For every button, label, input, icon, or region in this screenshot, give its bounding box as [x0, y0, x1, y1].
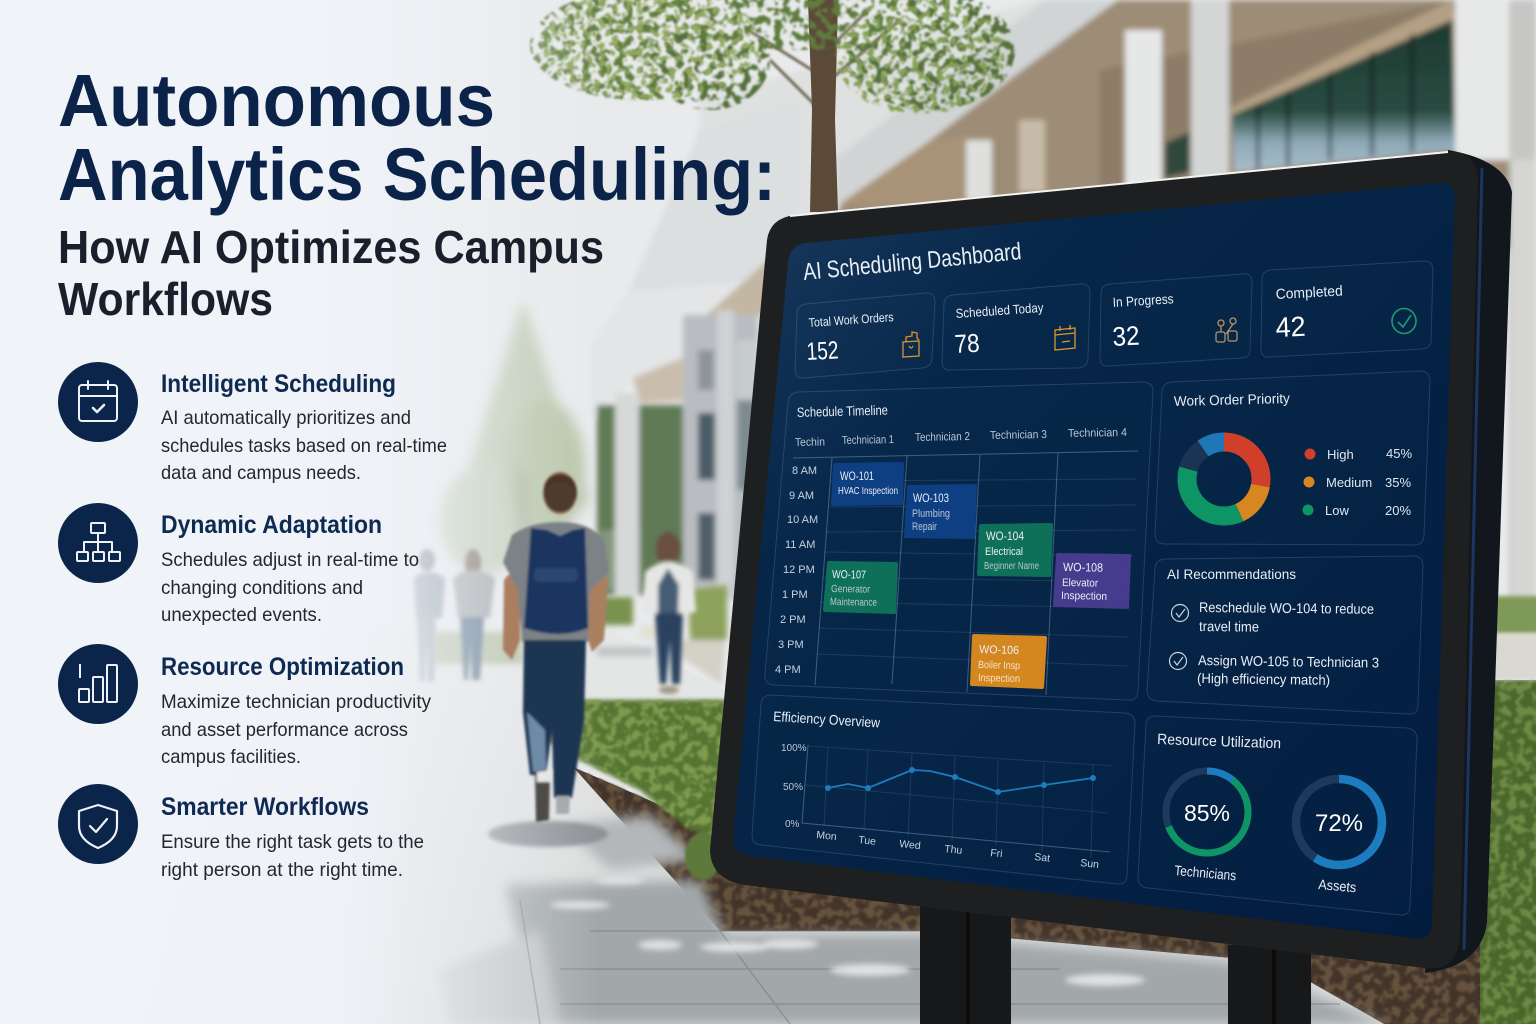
work order WO-104: WO-104: [986, 531, 1025, 543]
KPI card: scheduled today: [942, 284, 1090, 370]
work order WO-107: Generator: [831, 583, 871, 596]
panel: schedule timeline: [765, 382, 1153, 700]
work order WO-103: [906, 486, 975, 537]
column headers: Technician 2: [915, 431, 970, 444]
subtitle: How AI Optimizes Campus: [58, 221, 604, 273]
icon: calendar: [58, 362, 138, 442]
panel heading: AI Recommendations: [1167, 566, 1296, 582]
work order WO-101: WO-101: [840, 471, 874, 483]
panel: AI recommendations: [1147, 556, 1423, 714]
work order WO-107: Maintenance: [830, 596, 877, 609]
background: mulch: [573, 767, 1536, 1024]
line chart: Sun: [1080, 857, 1100, 871]
line chart: 100%: [781, 743, 807, 754]
feature: intelligent scheduling: Intelligent Scheduling: [161, 370, 396, 398]
gauge: technicians 85%: Technicians: [1174, 862, 1237, 883]
feature: dynamic adaptation: Schedules adjust in real-time to: [161, 549, 419, 571]
work order WO-108: Elevator: [1062, 577, 1098, 590]
display stand posts: [920, 900, 1311, 1024]
background: far building: [590, 100, 800, 600]
panel heading: Schedule Timeline: [797, 403, 888, 420]
time axis labels: 1 PM: [782, 589, 808, 601]
background: left white wash: [0, 0, 600, 1024]
donut legend: Low: [1325, 503, 1349, 518]
icon: hierarchy: [58, 503, 138, 583]
KPI card: in progress: In Progress: [1112, 291, 1174, 310]
background: person shadow: [488, 821, 608, 847]
panel: resource utilization: [1138, 716, 1417, 915]
work order WO-107: WO-107: [832, 569, 866, 582]
recommendation two: [1170, 652, 1379, 688]
work order WO-108: Inspection: [1061, 590, 1107, 603]
background: pavement shade: [440, 815, 1384, 1024]
icon: bar chart: [58, 644, 138, 724]
work order WO-103: Repair: [912, 521, 937, 533]
recommendation two: Assign WO-105 to Technician 3: [1198, 652, 1379, 671]
panel heading: Resource Utilization: [1157, 731, 1281, 752]
title: [58, 59, 776, 216]
KPI card: in progress: 32: [1112, 321, 1140, 352]
time axis labels: [775, 465, 818, 676]
work order WO-103: WO-103: [913, 493, 949, 505]
donut legend: 20%: [1385, 503, 1411, 518]
feature: resource optimization: and asset performance across: [161, 719, 408, 741]
background: tree foliage: [530, 0, 1015, 115]
display side edge: [1425, 150, 1512, 973]
work order WO-106: Boiler Insp: [978, 659, 1020, 672]
icon: shield: [58, 784, 138, 864]
feature: intelligent scheduling: [58, 362, 447, 484]
dashboard title: AI Scheduling Dashboard: [802, 238, 1023, 286]
dashboard screen: [733, 183, 1455, 939]
line chart: Thu: [944, 843, 963, 857]
gauge: technicians 85%: [1166, 771, 1248, 883]
donut legend: High: [1327, 447, 1354, 462]
work order WO-108: [1055, 555, 1129, 607]
feature: dynamic adaptation: [58, 503, 419, 626]
feature: resource optimization: [58, 644, 431, 768]
donut legend: 45%: [1386, 446, 1412, 461]
donut legend: [1302, 446, 1412, 518]
background: tree trunk: [808, 0, 838, 212]
feature: smarter workflows: Smarter Workflows: [161, 793, 369, 821]
KPI card: total work orders: [795, 293, 935, 378]
KPI card: scheduled today: 78: [954, 328, 980, 359]
column headers: Technician 3: [990, 429, 1047, 442]
work order WO-103: Plumbing: [912, 508, 950, 520]
time axis labels: 10 AM: [787, 514, 818, 526]
feature: intelligent scheduling: schedules tasks based on real-time: [161, 435, 447, 457]
column headers: Technician 1: [842, 434, 894, 447]
gauge: assets 72%: [1296, 779, 1382, 895]
panel: work order priority: [1155, 371, 1430, 545]
KPI card: completed: 42: [1275, 311, 1306, 343]
line chart: Tue: [858, 834, 877, 848]
icon: check circle: [1392, 308, 1416, 334]
feature: smarter workflows: [58, 784, 424, 881]
background: pavement: [0, 625, 1384, 1024]
panel: efficiency overview: [752, 695, 1135, 884]
time axis labels: 4 PM: [775, 664, 801, 676]
background: hedges: [525, 596, 1536, 1024]
subtitle: [58, 221, 604, 325]
time axis labels: 3 PM: [778, 639, 804, 651]
dashboard display: [710, 150, 1512, 973]
display bezel: [710, 152, 1478, 968]
gauge: assets 72%: Assets: [1318, 876, 1357, 895]
KPI card: total work orders: Total Work Orders: [808, 310, 894, 330]
work order WO-104: Electrical: [985, 546, 1023, 558]
column headers: Technician 4: [1068, 427, 1128, 440]
background: main walker: [503, 472, 609, 822]
time axis labels: 12 PM: [783, 564, 815, 576]
line chart: Mon: [816, 829, 837, 843]
feature: resource optimization: campus facilities.: [161, 746, 301, 768]
column headers: Techin: [795, 436, 825, 449]
donut chart: [1187, 442, 1261, 516]
panel heading: Work Order Priority: [1174, 390, 1290, 409]
gauge: technicians 85%: 85%: [1184, 800, 1230, 826]
title: Autonomous: [58, 59, 495, 142]
background: distant walkers: [414, 532, 696, 694]
work order WO-106: [972, 636, 1045, 687]
time axis labels: 9 AM: [789, 490, 814, 502]
icon: linked nodes: [1216, 318, 1237, 342]
recommendation one: Reschedule WO-104 to reduce: [1199, 599, 1374, 617]
subtitle: Workflows: [58, 273, 273, 325]
line chart: 50%: [783, 782, 803, 793]
line chart: Wed: [899, 838, 921, 852]
donut legend: Medium: [1326, 475, 1372, 490]
gauge: assets 72%: 72%: [1315, 810, 1363, 837]
time axis labels: 2 PM: [780, 614, 806, 626]
title: Analytics Scheduling:: [58, 133, 776, 216]
work order WO-101: HVAC Inspection: [838, 486, 898, 497]
column headers: [795, 427, 1128, 449]
timeline grid: [793, 451, 1138, 695]
time axis labels: 11 AM: [785, 539, 815, 551]
line chart: 0%: [785, 819, 800, 830]
background: pavement tile lines: [520, 900, 1340, 1024]
KPI card: in progress: [1100, 274, 1252, 366]
feature: dynamic adaptation: unexpected events.: [161, 604, 322, 626]
feature: smarter workflows: Ensure the right task gets to the: [161, 831, 424, 853]
recommendation one: travel time: [1199, 618, 1259, 635]
panel heading: Efficiency Overview: [773, 708, 881, 731]
KPI card: completed: [1261, 261, 1433, 357]
feature: intelligent scheduling: AI automatically prioritizes and: [161, 407, 411, 429]
background: sunlight patches: [550, 876, 1145, 986]
work order WO-104: Beginner Name: [984, 561, 1039, 572]
icon: calendar: [1055, 325, 1075, 350]
line chart: Fri: [990, 847, 1003, 860]
KPI card: total work orders: 152: [806, 336, 839, 366]
background: distant tree: [440, 300, 590, 575]
line chart: Sat: [1034, 851, 1051, 865]
feature: resource optimization: Maximize technician productivity: [161, 691, 431, 713]
donut legend: 35%: [1385, 475, 1411, 490]
feature: dynamic adaptation: Dynamic Adaptation: [161, 511, 382, 539]
work order WO-107: [825, 563, 896, 612]
KPI card: scheduled today: Scheduled Today: [955, 300, 1044, 321]
recommendation one: [1172, 599, 1374, 635]
feature: smarter workflows: right person at the right time.: [161, 859, 403, 881]
feature: dynamic adaptation: changing conditions and: [161, 577, 363, 599]
background: planters and low greens: [433, 585, 727, 685]
icon: puzzle: [903, 332, 919, 357]
feature: intelligent scheduling: data and campus needs.: [161, 462, 361, 484]
recommendation two: (High efficiency match): [1197, 670, 1330, 688]
work order WO-101: [833, 464, 902, 504]
work order WO-104: [979, 525, 1051, 575]
time axis labels: 8 AM: [792, 465, 817, 477]
line chart: [781, 743, 1113, 871]
work order WO-106: WO-106: [979, 644, 1019, 657]
feature: resource optimization: Resource Optimization: [161, 653, 404, 681]
KPI card: completed: Completed: [1275, 284, 1343, 303]
work order WO-108: WO-108: [1063, 560, 1103, 575]
background: upper building: [700, 0, 1536, 600]
work order WO-106: Inspection: [978, 672, 1020, 685]
